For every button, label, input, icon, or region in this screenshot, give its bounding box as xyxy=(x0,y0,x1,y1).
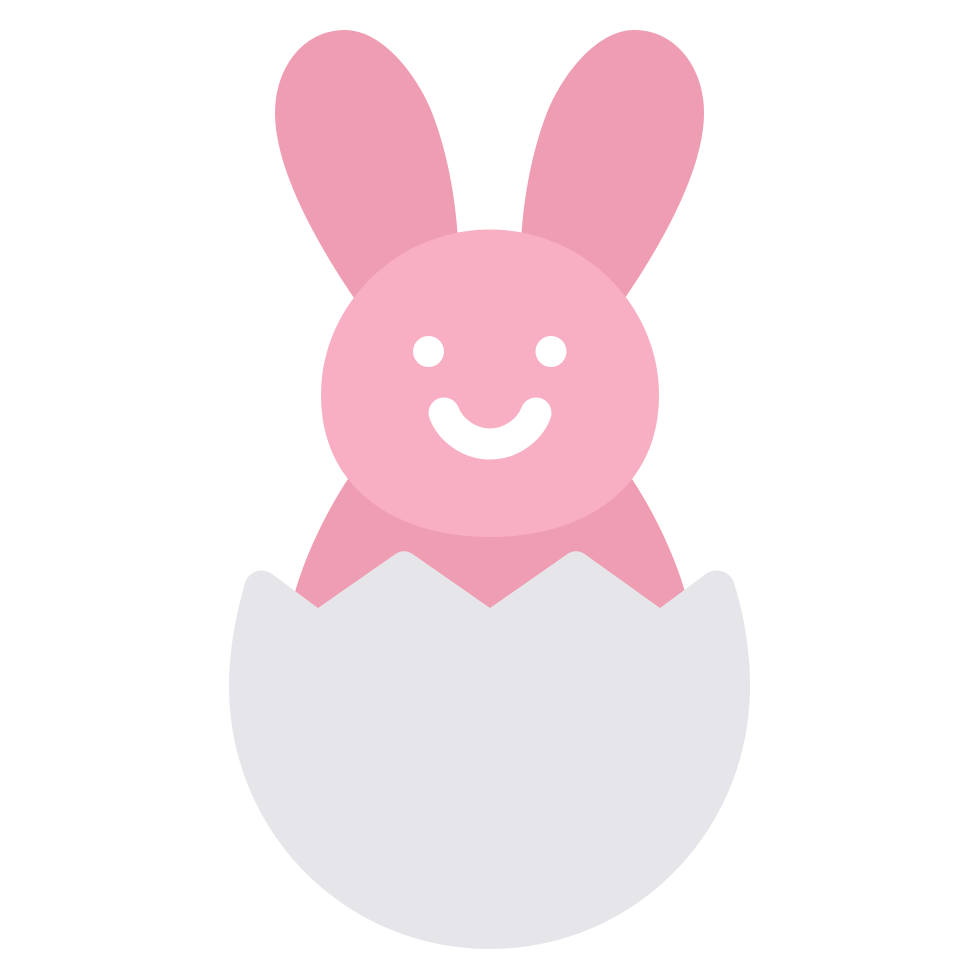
icon: right ear xyxy=(521,30,704,300)
icon: face xyxy=(413,336,566,444)
icon: left eye xyxy=(413,336,444,367)
icon: bunny head xyxy=(321,230,659,537)
icon: egg shell xyxy=(229,551,750,949)
icon: smile xyxy=(444,413,536,444)
icon: left ear xyxy=(275,30,458,300)
icon: bunny body xyxy=(295,473,685,620)
icon: right eye xyxy=(536,336,566,367)
